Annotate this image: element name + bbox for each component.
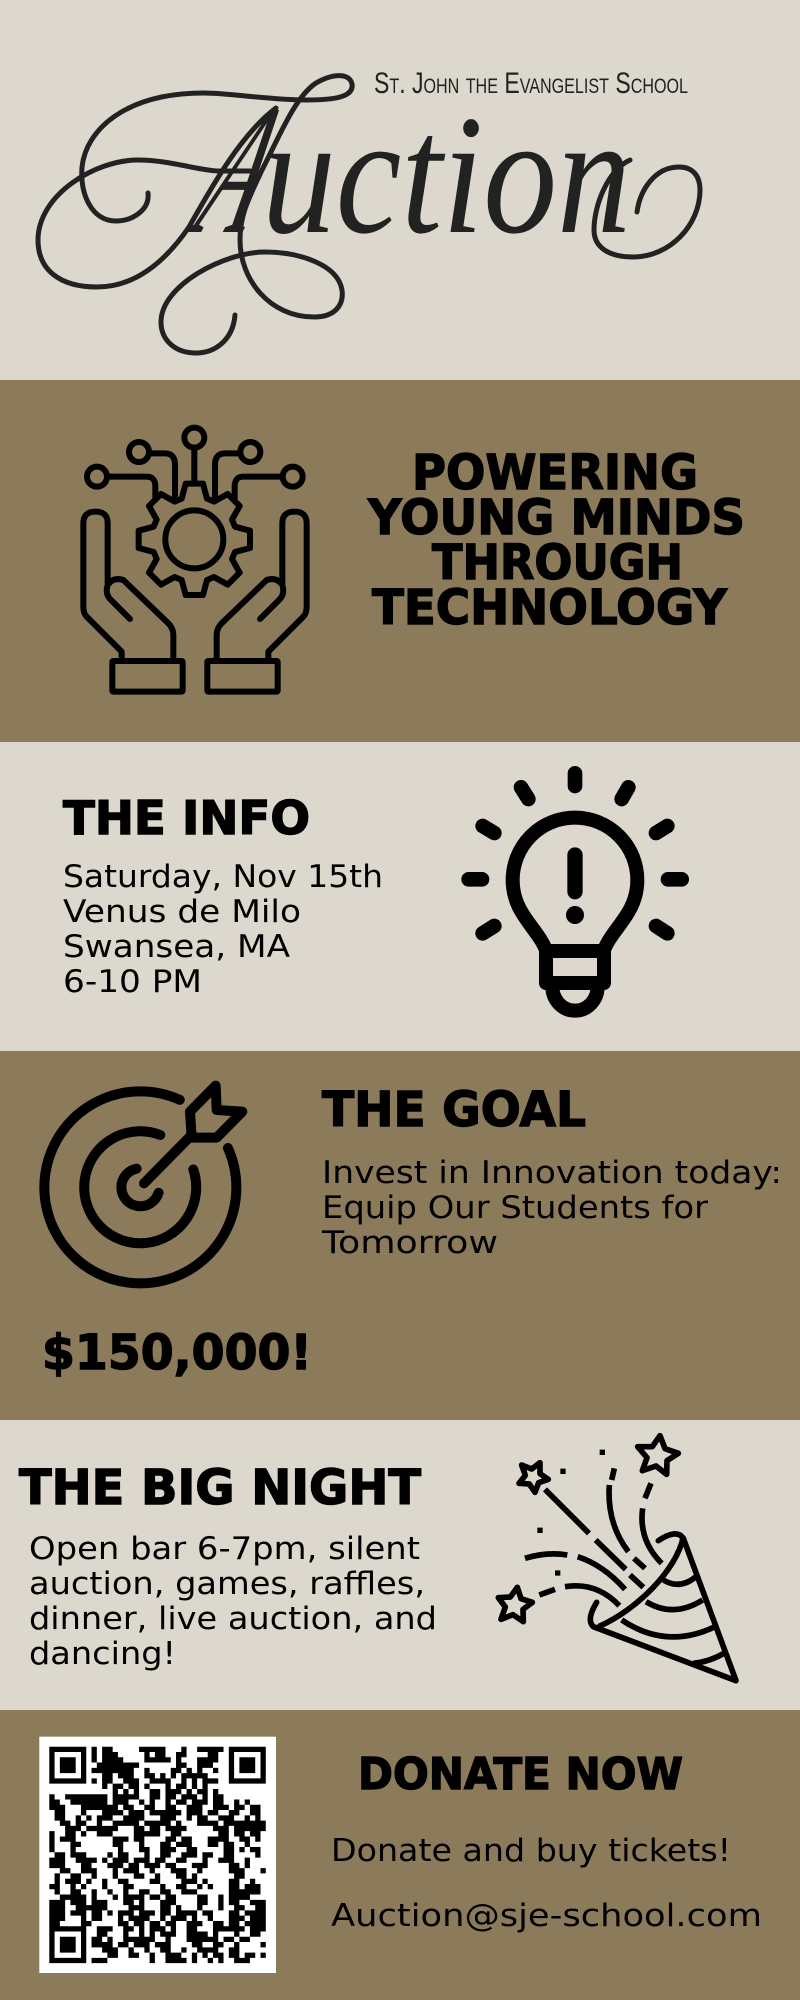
- heading: powering young minds through technology: TECHNOLOGY: [372, 580, 728, 636]
- QR code: [39, 1737, 276, 1973]
- heading: the info: THE INFO: [63, 791, 310, 845]
- panel: the info: [0, 742, 800, 1051]
- text: goal description: Equip Our Students for: [322, 1190, 708, 1226]
- text: goal description: [321, 1155, 782, 1261]
- panel: mission: [0, 380, 800, 742]
- text: evening program: [29, 1531, 437, 1672]
- school name: St. John the Evangelist School: [374, 67, 688, 100]
- heading: powering young minds through technology: [367, 445, 745, 636]
- panel: auction header: [0, 0, 800, 380]
- heading: the goal: THE GOAL: [322, 1082, 586, 1138]
- text: event details: 6-10 PM: [63, 964, 202, 1000]
- text: evening program: dancing!: [29, 1636, 176, 1672]
- title: Auction script: uction: [262, 81, 631, 269]
- text: goal description: Invest in Innovation today:: [322, 1155, 782, 1191]
- heading: powering young minds through technology: POWERING: [412, 445, 698, 501]
- text: event details: [63, 859, 383, 1000]
- text: event details: Swansea, MA: [63, 929, 290, 965]
- title: Auction script: [38, 69, 700, 353]
- title: Auction script: A: [168, 69, 312, 273]
- text: contact email: Auction@sje-school.com: [331, 1898, 762, 1934]
- heading: donate now: DONATE NOW: [358, 1749, 683, 1800]
- icon: light bulb: [469, 773, 682, 1011]
- panel: the big night: [0, 1420, 800, 1710]
- text: goal description: Tomorrow: [321, 1225, 498, 1261]
- heading: powering young minds through technology: YOUNG MINDS: [367, 490, 745, 546]
- text: event details: Saturday, Nov 15th: [63, 859, 383, 895]
- panel: donate: [0, 1710, 800, 2000]
- icon: hands holding gear: [83, 428, 307, 692]
- text: donate and buy tickets: Donate and buy tickets!: [331, 1833, 731, 1869]
- text: evening program: auction, games, raffles,: [29, 1566, 425, 1602]
- panel: the goal: [0, 1051, 800, 1420]
- heading: the big night: THE BIG NIGHT: [19, 1460, 421, 1516]
- icon: party popper: [498, 1436, 736, 1681]
- heading: powering young minds through technology: THROUGH: [432, 535, 683, 591]
- text: evening program: Open bar 6-7pm, silent: [29, 1531, 420, 1567]
- goal amount: $150,000!: [42, 1325, 312, 1381]
- icon: target with arrow: [44, 1086, 242, 1283]
- text: event details: Venus de Milo: [63, 894, 301, 930]
- text: evening program: dinner, live auction, and: [29, 1601, 437, 1637]
